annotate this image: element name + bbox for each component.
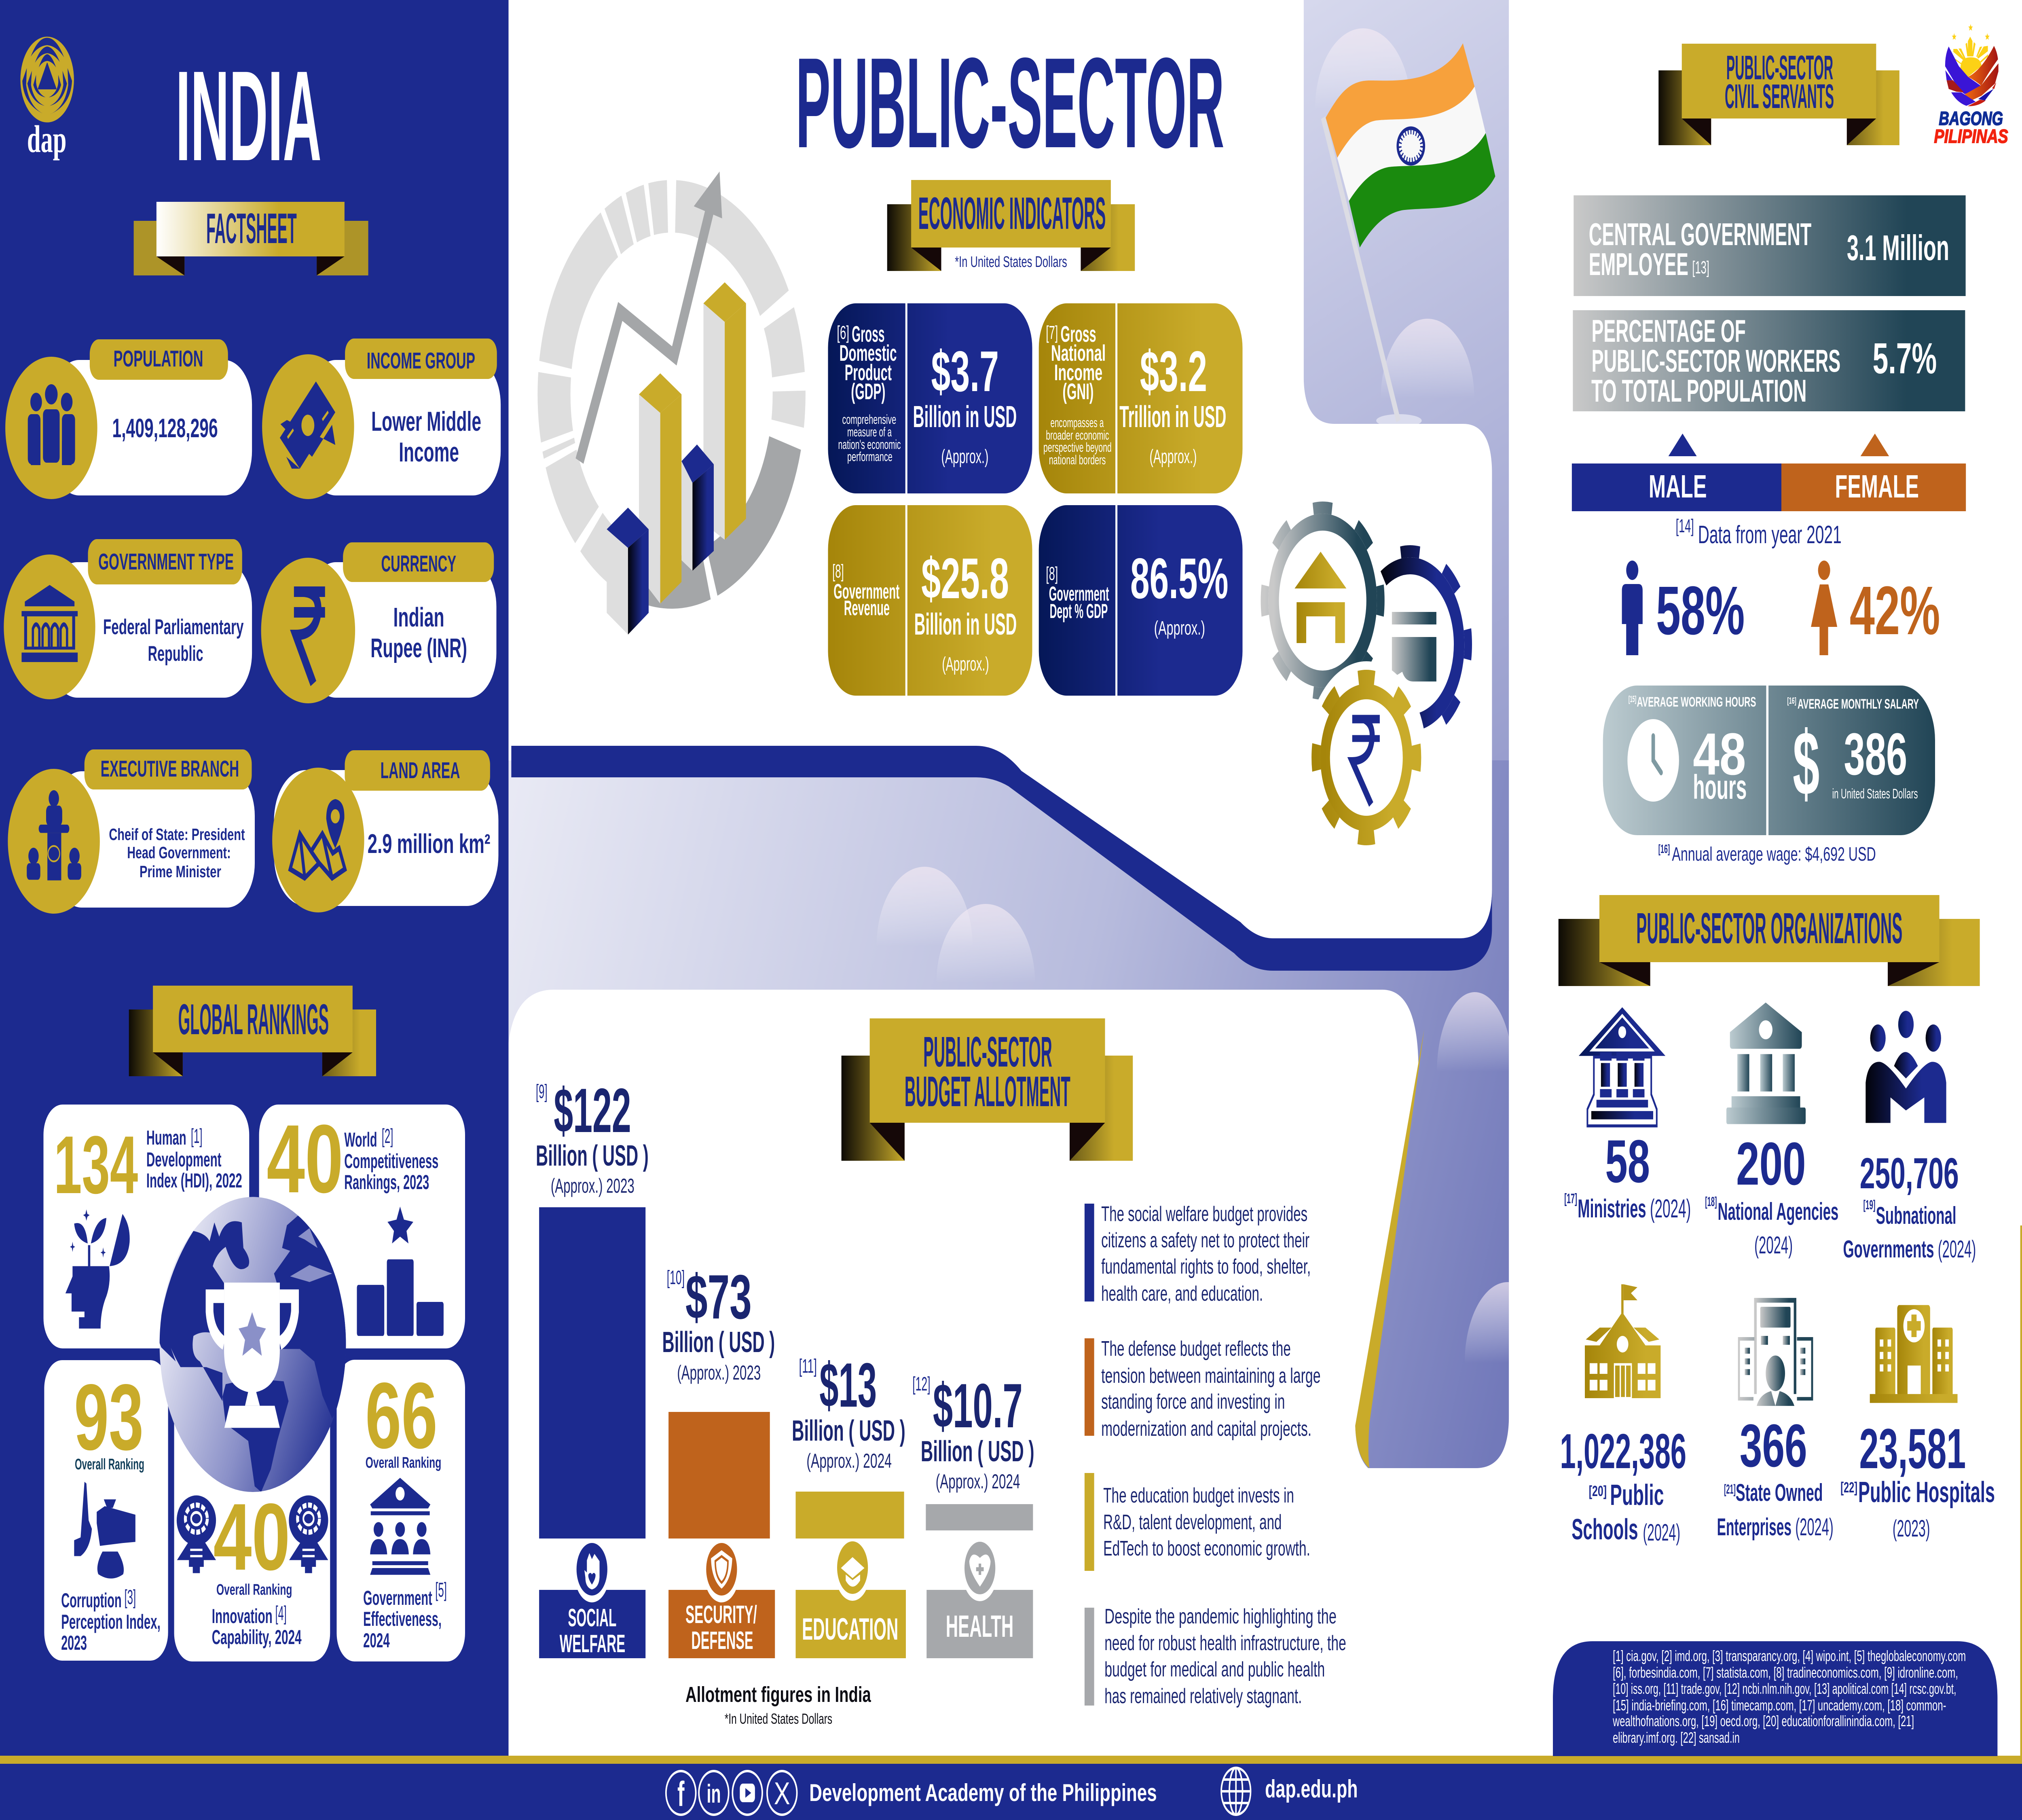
logo: dap xyxy=(20,37,74,161)
card: world competitiveness: Rankings, 2023 xyxy=(344,1170,429,1194)
card: government debt: [8] xyxy=(1046,563,1058,584)
org: public hospitals: [22] xyxy=(1840,1480,1857,1496)
gender split header: [14] xyxy=(1676,516,1694,537)
ribbon: global rankings xyxy=(129,986,376,1076)
card: innovation capability: Innovation xyxy=(212,1604,273,1627)
title: India: INDIA xyxy=(176,45,321,188)
org: ministries: Ministries xyxy=(1578,1195,1646,1223)
stat pill: hours and salary: 48 xyxy=(1693,721,1746,787)
text block: social welfare note xyxy=(1085,1202,1311,1306)
card: government effectiveness: Overall Ranking xyxy=(366,1454,441,1471)
card: government revenue: (Approx.) xyxy=(942,654,989,675)
gear: gold xyxy=(1316,677,1417,838)
bar chart: budget allotment xyxy=(536,1076,1034,1658)
card: human development index: [1] xyxy=(191,1124,203,1147)
bar: social welfare: WELFARE xyxy=(560,1630,625,1657)
icon: head with sprout xyxy=(66,1209,130,1329)
card: government effectiveness: 66 xyxy=(365,1363,438,1468)
card: corruption perception index xyxy=(44,1360,168,1661)
card: gross national income: (GNI) xyxy=(1063,379,1093,404)
stat pill: hours and salary: $ xyxy=(1793,712,1819,814)
text block: health note: budget for medical and public health xyxy=(1104,1658,1325,1681)
card: currency xyxy=(261,542,497,703)
card: government effectiveness: [5] xyxy=(435,1578,447,1601)
isometric bars xyxy=(607,282,746,635)
footer gold line xyxy=(0,1756,2022,1764)
icon: globe xyxy=(1221,1768,1250,1815)
left navy panel xyxy=(0,0,509,1757)
card: gross domestic product: performance xyxy=(847,449,893,464)
panel: sources box: [1] cia.gov, [2] imd.org, [3] transparancy.org, [4] wipo.int, [5] theglobaleconomy.com xyxy=(1613,1647,1966,1664)
icon: globe with trophy xyxy=(158,1197,350,1492)
stat bar: central government employee: CENTRAL GOVERNMENT xyxy=(1589,216,1812,252)
bar: security and defense: Billion ( USD ) xyxy=(662,1326,775,1359)
org: public hospitals: Public Hospitals xyxy=(1858,1476,1995,1509)
card: gross domestic product: measure of a xyxy=(847,425,892,439)
ribbon: public-sector organizations xyxy=(1559,895,1980,986)
bar: education: [11] xyxy=(799,1356,817,1377)
stat pill: hours and salary: AVERAGE MONTHLY SALARY xyxy=(1798,696,1919,712)
card: human development index xyxy=(44,1105,249,1348)
panel: sources box: wealthofnations.org, [19] oecd.org, [20] educationforallinindia.com, [21] xyxy=(1612,1712,1914,1729)
org: state owned enterprises: State Owned xyxy=(1736,1479,1823,1506)
org: state owned enterprises: 366 xyxy=(1740,1412,1807,1479)
bar: education xyxy=(792,1350,906,1658)
icon: linkedin xyxy=(699,1771,729,1815)
gear: teal xyxy=(1265,508,1381,694)
card: gross domestic product: nation's economic xyxy=(838,437,901,452)
icon: government people xyxy=(370,1478,430,1575)
panel: economic indicators white background xyxy=(509,0,1492,938)
ribbon: civil servants: PUBLIC-SECTOR xyxy=(1726,49,1833,87)
org: subnational governments: 250,706 xyxy=(1860,1149,1959,1198)
card: world competitiveness: World xyxy=(344,1128,377,1151)
bubble decoration: top right xyxy=(1315,28,1474,478)
stat bar: central government employee: [13] xyxy=(1692,257,1709,277)
lavender backdrop: lower centre xyxy=(509,760,1509,1468)
card: gross national income: Gross xyxy=(1060,322,1096,347)
card: world competitiveness: [2] xyxy=(382,1124,393,1147)
card: government effectiveness xyxy=(336,1360,465,1661)
trophy xyxy=(209,1282,295,1428)
icon: x xyxy=(767,1771,797,1815)
card: gross national income: $3.2 xyxy=(1140,340,1207,404)
stat pill: hours and salary: AVERAGE WORKING HOURS xyxy=(1637,694,1756,710)
card: income group: Income xyxy=(399,437,459,468)
icon: gears xyxy=(1265,508,1468,854)
org: subnational governments: (2024) xyxy=(1938,1236,1976,1263)
org: public hospitals: 23,581 xyxy=(1859,1417,1966,1480)
card: government revenue: $25.8 xyxy=(921,547,1009,611)
card: land area xyxy=(272,750,498,912)
panel: sources box: [10] iss.org, [11] trade.gov, [12] ncbi.nlm.nih.gov, [13] apolitical.com [14] rcsc.gov.bt, xyxy=(1613,1680,1956,1697)
org: ministries xyxy=(1564,1007,1691,1223)
card: world competitiveness: Competitiveness xyxy=(344,1149,438,1172)
stat bar: percentage of public-sector workers: 5.7% xyxy=(1873,334,1937,383)
text block: defense note: standing force and investing in xyxy=(1101,1390,1285,1414)
text: annual average wage: Annual average wage: $4,692 USD xyxy=(1672,844,1876,865)
white cover right column xyxy=(1509,0,2022,1763)
card: gross domestic product: Gross xyxy=(852,322,885,347)
ribbon: budget allotment: PUBLIC-SECTOR xyxy=(923,1028,1052,1076)
footer website: dap.edu.ph xyxy=(1265,1775,1358,1803)
bar: social welfare: $122 xyxy=(554,1076,631,1146)
text block: social welfare note: citizens a safety net to protect their xyxy=(1101,1229,1309,1252)
text block: education note: The education budget invests in xyxy=(1103,1484,1294,1507)
bar: education: (Approx.) 2024 xyxy=(806,1449,892,1472)
card: corruption perception index: 2023 xyxy=(61,1631,87,1654)
stat bar: central government employee: 3.1 Million xyxy=(1847,228,1949,268)
card: gross national income: perspective beyond xyxy=(1043,440,1112,455)
card: world competitiveness xyxy=(259,1105,465,1348)
card: corruption perception index: Overall Ranking xyxy=(75,1455,144,1473)
icon: people xyxy=(28,384,75,465)
org: public hospitals: (2023) xyxy=(1893,1515,1930,1542)
footer organization name: Development Academy of the Philippines xyxy=(809,1779,1157,1806)
card: government debt xyxy=(1039,505,1242,696)
gear: navy xyxy=(1352,551,1468,737)
card: government revenue: Government xyxy=(833,580,899,603)
card: gross national income: encompasses a xyxy=(1051,415,1104,430)
panel: sources box: [15] india-briefing.com, [16] timecamp.com, [17] uncademy.com, [18] common- xyxy=(1613,1697,1946,1714)
card: gross domestic product: (Approx.) xyxy=(941,446,988,468)
icon: rupee xyxy=(294,592,325,684)
icon: clock xyxy=(1627,719,1679,802)
icon: money xyxy=(280,381,335,469)
card: government type: Republic xyxy=(148,642,203,666)
stat: male share: 58% xyxy=(1656,573,1745,649)
icon: school xyxy=(1585,1284,1660,1398)
ribbon: factsheet: FACTSHEET xyxy=(206,204,297,252)
org: public schools: Public xyxy=(1610,1479,1664,1511)
org: national agencies: 200 xyxy=(1736,1130,1806,1198)
gender split header: MALE xyxy=(1649,469,1707,505)
ribbon: economic indicators: ECONOMIC INDICATORS xyxy=(918,188,1106,239)
logo: bagong pilipinas: PILIPINAS xyxy=(1934,126,2008,147)
stat pill: hours and salary: [15] xyxy=(1629,694,1636,704)
icon: indian flag xyxy=(1323,43,1495,427)
card: gross domestic product: [6] xyxy=(837,322,849,343)
card: government revenue: [8] xyxy=(832,561,844,582)
stat bar: percentage of public-sector workers: PUBLIC-SECTOR WORKERS xyxy=(1592,343,1840,379)
card: corruption perception index: Perception Index, xyxy=(61,1610,161,1633)
org: public schools: [20] xyxy=(1589,1484,1607,1499)
text block: health note xyxy=(1085,1605,1346,1708)
text block: health note: has remained relatively stagnant. xyxy=(1104,1685,1302,1708)
icon: hospital xyxy=(1870,1305,1958,1403)
stat pill: hours and salary: hours xyxy=(1693,768,1747,806)
org: national agencies: National Agencies xyxy=(1718,1198,1838,1225)
gender split header: Data from year 2021 xyxy=(1698,521,1842,548)
text block: education note: EdTech to boost economic growth. xyxy=(1103,1537,1310,1560)
card: gross national income: National xyxy=(1051,341,1106,366)
bar: education: $13 xyxy=(819,1350,877,1420)
org: state owned enterprises xyxy=(1717,1300,1834,1541)
ribbon: civil servants xyxy=(1658,44,1899,145)
card: population: 1,409,128,296 xyxy=(112,413,218,443)
bar: health xyxy=(912,1371,1034,1658)
icon: facebook: f xyxy=(677,1775,685,1814)
text block: social welfare note: The social welfare budget provides xyxy=(1101,1202,1307,1226)
icon: podium and star xyxy=(357,1206,444,1336)
ribbon: budget allotment xyxy=(842,1018,1133,1161)
panel: budget white background xyxy=(508,990,1512,1757)
card: population xyxy=(5,339,252,499)
card: corruption perception index: 93 xyxy=(74,1365,144,1469)
panel: sources box xyxy=(1553,1641,1997,1756)
panel: sources box: [6], forbesindia.com, [7] statista.com, [8] tradineconomics.com, [9] idronline.com, xyxy=(1613,1664,1958,1681)
icon: ministry building xyxy=(1579,1007,1665,1126)
icon: rocket gears xyxy=(177,1495,328,1573)
ribbon: global rankings: GLOBAL RANKINGS xyxy=(178,995,329,1043)
card: innovation capability: [4] xyxy=(275,1602,287,1625)
card: government revenue xyxy=(828,505,1032,696)
card: income group: INCOME GROUP xyxy=(367,348,475,374)
card: government revenue: Revenue xyxy=(844,597,890,620)
navy swoosh band xyxy=(511,746,1492,971)
ribbon: civil servants: CIVIL SERVANTS xyxy=(1725,77,1834,115)
card: income group: Lower Middle xyxy=(371,406,481,437)
card: executive branch: Head Government: xyxy=(127,844,231,862)
card: land area: 2.9 million km² xyxy=(368,828,490,859)
icon: facebook xyxy=(666,1771,696,1815)
lavender backdrop: top right patch xyxy=(1304,0,1509,991)
text block: health note: need for robust health infrastructure, the xyxy=(1104,1632,1346,1655)
text: annual average wage: [16] xyxy=(1658,842,1670,856)
card: government effectiveness: Effectiveness, xyxy=(363,1607,442,1630)
ribbon: economic indicators: *In United States Dollars xyxy=(955,253,1067,270)
icon: people handshake xyxy=(1865,1011,1946,1123)
org: public schools xyxy=(1560,1284,1686,1546)
card: innovation capability: Overall Ranking xyxy=(216,1581,292,1598)
chart caption: Allotment figures in India xyxy=(685,1682,871,1707)
text block: defense note: The defense budget reflects the xyxy=(1101,1337,1291,1361)
card: human development index: Development xyxy=(146,1148,222,1171)
panel: sources box: elibrary.imf.org. [22] sansad.in xyxy=(1613,1729,1740,1746)
card: innovation capability: Capability, 2024 xyxy=(212,1625,302,1649)
bar: security and defense: $73 xyxy=(685,1262,752,1332)
chart illustration: ring, arrow and isometric bars xyxy=(506,128,838,660)
org: national agencies: [18] xyxy=(1705,1194,1717,1209)
logo: dap: dap xyxy=(27,118,66,161)
card: government debt: Government xyxy=(1049,582,1109,605)
bar: education: EDUCATION xyxy=(802,1613,898,1646)
stat pill: hours and salary: [16] xyxy=(1787,696,1796,706)
card: gross national income xyxy=(1039,303,1242,493)
card: human development index: Human xyxy=(146,1126,186,1149)
gold sliver xyxy=(1355,1029,1424,1468)
bar: security and defense xyxy=(662,1262,775,1658)
bar: security and defense: DEFENSE xyxy=(691,1626,753,1654)
stat pill: hours and salary: in United States Dollars xyxy=(1832,786,1918,802)
bar: security and defense: (Approx.) 2023 xyxy=(677,1361,761,1384)
text block: education note xyxy=(1085,1473,1310,1571)
card: government effectiveness: Government xyxy=(363,1586,432,1609)
org: public schools: (2024) xyxy=(1643,1519,1680,1546)
org: subnational governments xyxy=(1843,1011,1976,1263)
bar: health: [12] xyxy=(912,1373,931,1395)
card: innovation capability xyxy=(174,1395,330,1661)
icon: refusing bribe xyxy=(74,1482,135,1579)
card: gross national income: broader economic xyxy=(1046,428,1109,442)
card: government revenue: Billion in USD xyxy=(914,607,1017,641)
bar: health: (Approx.) 2024 xyxy=(936,1470,1020,1493)
stat: female share xyxy=(1811,561,1940,655)
card: gross domestic product: Billion in USD xyxy=(913,400,1017,434)
card: human development index: Index (HDI), 2022 xyxy=(146,1169,242,1192)
card: government type: Federal Parliamentary xyxy=(103,615,244,639)
card: gross national income: Trillion in USD xyxy=(1119,400,1226,434)
gender split header: FEMALE xyxy=(1835,469,1919,505)
org: public schools: Schools xyxy=(1571,1513,1638,1546)
card: world competitiveness: 40 xyxy=(266,1105,343,1213)
org: state owned enterprises: (2024) xyxy=(1795,1513,1834,1541)
chart caption xyxy=(685,1682,871,1727)
logo: bagong pilipinas: BAGONG xyxy=(1939,108,2003,129)
org: national agencies: (2024) xyxy=(1754,1232,1793,1259)
icon: youtube xyxy=(732,1771,762,1815)
icon: house xyxy=(1294,552,1346,643)
card: government debt: (Approx.) xyxy=(1154,618,1205,639)
stat bar: central government employee xyxy=(1574,195,1966,296)
text block: defense note: modernization and capital projects. xyxy=(1101,1417,1311,1441)
bar: security and defense: SECURITY/ xyxy=(685,1600,757,1628)
card: corruption perception index: [3] xyxy=(125,1585,136,1608)
text block: defense note: tension between maintaining a large xyxy=(1101,1364,1321,1388)
card: gross national income: national borders xyxy=(1049,453,1106,467)
bar: social welfare: Billion ( USD ) xyxy=(536,1139,649,1172)
icon: x: X xyxy=(774,1776,790,1811)
card: gross national income: [7] xyxy=(1046,322,1058,343)
bar: social welfare xyxy=(536,1076,649,1658)
title: public-sector: PUBLIC-SECTOR xyxy=(796,31,1225,175)
bar: health: Billion ( USD ) xyxy=(921,1435,1034,1468)
org: ministries: [17] xyxy=(1564,1191,1577,1206)
stat pill: hours and salary: 386 xyxy=(1844,721,1907,787)
text block: education note: R&D, talent development, and xyxy=(1103,1511,1282,1534)
card: government debt: Dept % GDP xyxy=(1050,599,1108,622)
logo: bagong pilipinas xyxy=(1934,24,2008,147)
card: executive branch: EXECUTIVE BRANCH xyxy=(101,756,239,782)
bar: security and defense: [10] xyxy=(667,1267,685,1289)
text block: social welfare note: health care, and education. xyxy=(1101,1282,1263,1306)
footer bar xyxy=(0,1225,2022,1820)
stat pill: hours and salary xyxy=(1603,686,1935,835)
icon: agency building xyxy=(1726,1003,1806,1124)
stat: male share xyxy=(1622,561,1745,655)
card: currency: Indian xyxy=(393,602,444,632)
card: human development index: 134 xyxy=(54,1119,138,1211)
bar: health: $10.7 xyxy=(933,1371,1023,1441)
ribbon: economic indicators xyxy=(887,180,1135,272)
card: gross domestic product: (GDP) xyxy=(851,379,885,404)
org: national agencies xyxy=(1705,1003,1838,1259)
card: gross national income: Income xyxy=(1054,360,1102,385)
org: subnational governments: [19] xyxy=(1863,1198,1875,1212)
org: public hospitals xyxy=(1840,1305,1995,1542)
org: ministries: 58 xyxy=(1605,1127,1650,1195)
card: innovation capability: 40 xyxy=(214,1484,290,1590)
org: ministries: (2024) xyxy=(1650,1195,1691,1223)
card: government effectiveness: 2024 xyxy=(363,1629,390,1652)
org: subnational governments: Governments xyxy=(1843,1236,1934,1263)
text block: defense note xyxy=(1085,1337,1321,1441)
stat bar: percentage of public-sector workers: TO TOTAL POPULATION xyxy=(1591,373,1807,408)
icon: gear rupee xyxy=(1352,719,1380,804)
card: executive branch xyxy=(8,749,255,914)
card: currency: CURRENCY xyxy=(381,551,456,577)
text block: health note: Despite the pandemic highlighting the xyxy=(1104,1605,1337,1628)
card: government type: GOVERNMENT TYPE xyxy=(98,549,234,575)
card: gross national income: (Approx.) xyxy=(1149,446,1197,468)
icon: map pin xyxy=(290,799,345,878)
stat: female share: 42% xyxy=(1850,573,1940,649)
icon: document xyxy=(1392,612,1436,681)
card: gross domestic product: comprehensive xyxy=(842,412,896,427)
ribbon: budget allotment: BUDGET ALLOTMENT xyxy=(905,1067,1070,1115)
icon: executive xyxy=(27,790,81,880)
card: government debt: 86.5% xyxy=(1130,547,1229,611)
bar: health: HEALTH xyxy=(946,1610,1013,1644)
bar: social welfare: [9] xyxy=(536,1081,548,1103)
card: executive branch: Cheif of State: President xyxy=(109,825,245,844)
icon: parliament xyxy=(21,585,78,662)
bar: education: Billion ( USD ) xyxy=(792,1414,905,1447)
card: gross domestic product: $3.7 xyxy=(931,340,999,404)
gender split header xyxy=(1572,434,1966,548)
card: land area: LAND AREA xyxy=(381,758,460,783)
bar: social welfare: (Approx.) 2023 xyxy=(551,1174,635,1197)
card: corruption perception index: Corruption xyxy=(61,1589,122,1612)
org: public schools: 1,022,386 xyxy=(1560,1424,1686,1479)
bubble decoration: lower xyxy=(877,867,1550,1444)
card: currency: Rupee (INR) xyxy=(370,633,467,663)
stat bar: central government employee: EMPLOYEE xyxy=(1589,246,1688,282)
card: executive branch: Prime Minister xyxy=(140,863,221,881)
ring segments xyxy=(506,128,838,660)
bar: social welfare: SOCIAL xyxy=(568,1604,616,1632)
stat bar: percentage of public-sector workers: PERCENTAGE OF xyxy=(1592,313,1746,349)
icon: office and official xyxy=(1739,1300,1812,1406)
rising arrow xyxy=(580,202,712,461)
org: state owned enterprises: [21] xyxy=(1724,1482,1736,1496)
chart caption: *In United States Dollars xyxy=(725,1711,832,1727)
card: income group xyxy=(262,339,501,499)
org: subnational governments: Subnational xyxy=(1876,1202,1956,1229)
org: state owned enterprises: Enterprises xyxy=(1717,1513,1791,1541)
card: gross domestic product: Domestic xyxy=(840,341,897,366)
stat bar: percentage of public-sector workers xyxy=(1573,310,1965,411)
card: gross domestic product: Product xyxy=(845,360,892,385)
card: government type xyxy=(4,539,252,699)
ribbon: factsheet xyxy=(134,202,368,275)
icon: linkedin: in xyxy=(707,1780,721,1808)
card: gross domestic product xyxy=(828,303,1032,493)
text block: social welfare note: fundamental rights to food, shelter, xyxy=(1101,1255,1311,1278)
card: population: POPULATION xyxy=(114,346,203,372)
